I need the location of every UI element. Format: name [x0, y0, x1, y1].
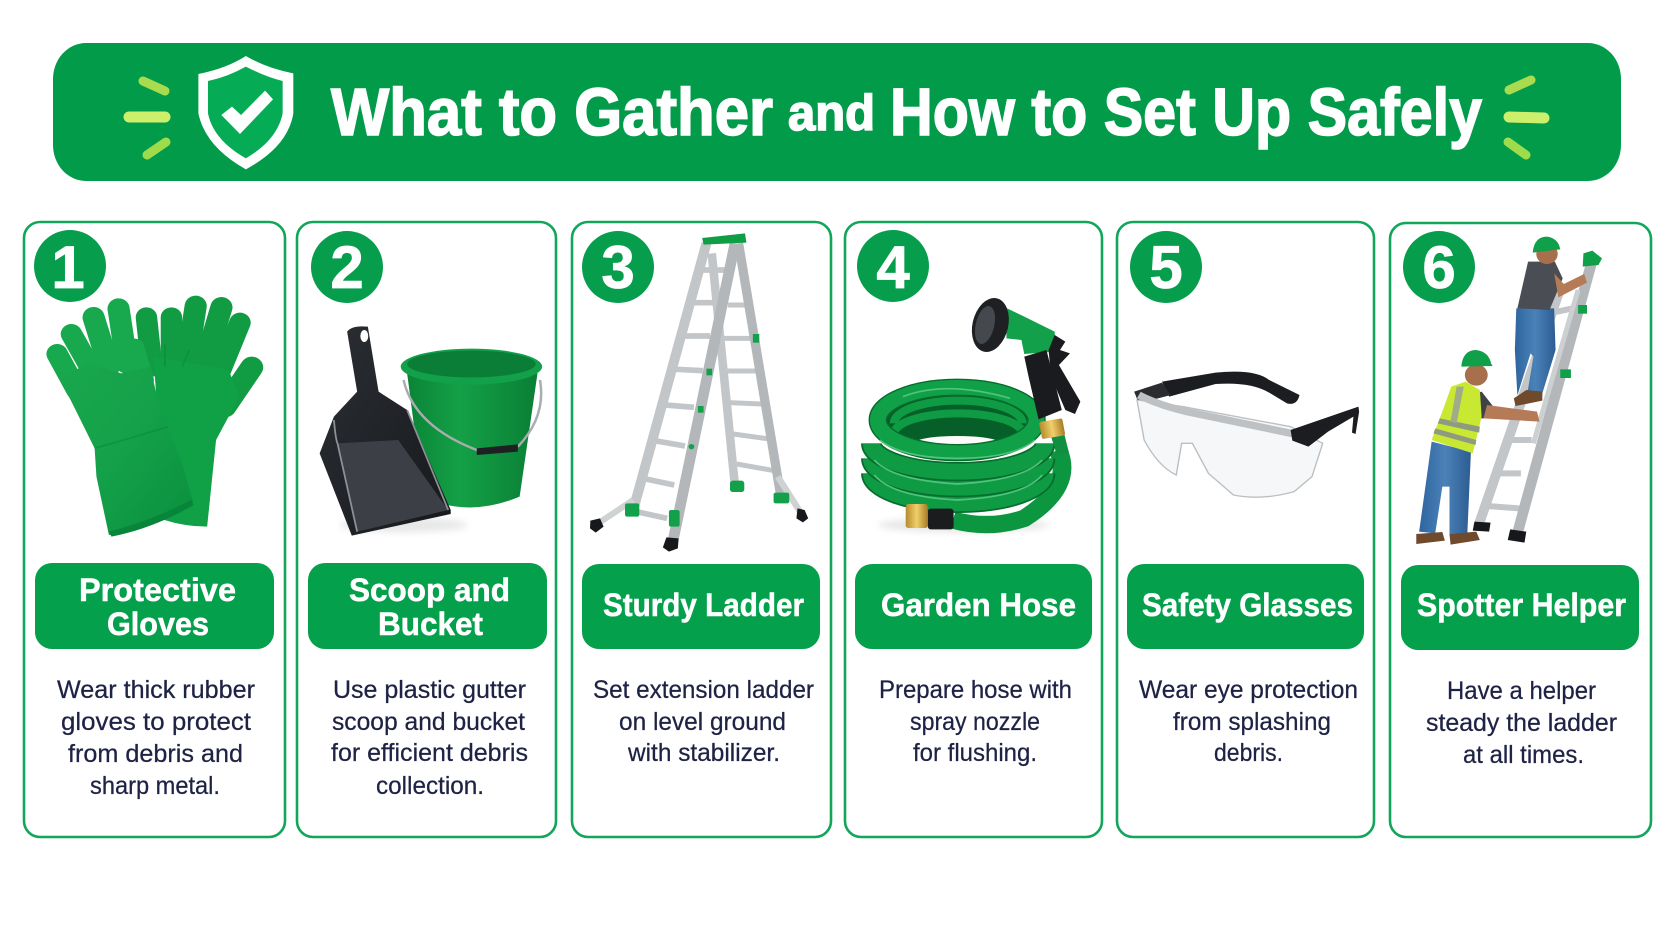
description	[879, 676, 1072, 767]
number badge 3	[582, 231, 654, 303]
icon: step ladder	[590, 233, 808, 552]
upper worker	[1514, 237, 1587, 406]
description	[331, 676, 528, 800]
description: Wear thick rubber	[57, 676, 255, 704]
label pill: Spotter Helper	[1417, 587, 1626, 623]
description: Use plastic gutter	[333, 676, 526, 704]
description: at all times.	[1463, 741, 1584, 769]
label pill	[308, 563, 547, 649]
description: sharp metal.	[90, 772, 220, 800]
icon: right sparkle rays	[1508, 80, 1544, 155]
description	[57, 676, 255, 800]
title banner	[53, 43, 1621, 181]
description: Prepare hose with	[879, 676, 1072, 704]
label pill	[1127, 564, 1364, 649]
icon: workers on extension ladder	[1416, 237, 1602, 545]
label pill	[855, 564, 1092, 649]
icon: scoop and bucket	[320, 326, 542, 536]
number badge 4	[857, 230, 929, 302]
description: debris.	[1214, 739, 1283, 767]
description	[593, 676, 814, 767]
icon: garden hose with nozzle	[871, 295, 1080, 532]
number badge 1: 1	[51, 234, 85, 301]
label pill: Gloves	[107, 606, 209, 642]
description: for flushing.	[913, 739, 1037, 767]
panel: 3 sturdy ladder	[572, 222, 831, 837]
lower worker spotter	[1416, 350, 1539, 545]
description: for efficient debris	[331, 739, 528, 767]
description: collection.	[376, 772, 484, 800]
label pill	[35, 563, 274, 649]
number badge 1	[34, 230, 106, 302]
description: Set extension ladder	[593, 676, 814, 704]
description: gloves to protect	[61, 708, 251, 736]
description	[1139, 676, 1358, 767]
icon: shield with check mark	[198, 56, 293, 169]
title text: How to Set Up Safely	[890, 75, 1482, 150]
number badge 6: 6	[1422, 234, 1456, 301]
title text: and	[788, 85, 875, 141]
label pill: Protective	[79, 572, 236, 608]
title text	[331, 75, 1482, 150]
description: from splashing	[1173, 708, 1331, 736]
number badge 6	[1403, 231, 1475, 303]
number badge 2	[311, 231, 383, 303]
number badge 5: 5	[1149, 234, 1183, 301]
label pill	[582, 564, 820, 649]
label pill: Sturdy Ladder	[603, 587, 804, 623]
icon: safety glasses	[1134, 372, 1359, 497]
label pill: Safety Glasses	[1142, 587, 1353, 623]
panel: 5 safety glasses	[1117, 222, 1374, 837]
description: with stabilizer.	[627, 739, 780, 767]
description: Wear eye protection	[1139, 676, 1358, 704]
panel: 6 spotter helper	[1390, 223, 1651, 837]
description: Have a helper	[1447, 677, 1596, 705]
number badge 5	[1130, 231, 1202, 303]
panel: 4 garden hose	[845, 222, 1102, 837]
label pill: Scoop and	[349, 572, 510, 608]
panel: 1 protective gloves	[24, 222, 285, 837]
number badge 4: 4	[876, 234, 910, 301]
label pill	[1401, 565, 1639, 650]
description: spray nozzle	[910, 708, 1040, 736]
number badge 3: 3	[601, 234, 635, 301]
description: on level ground	[619, 708, 786, 736]
description: scoop and bucket	[332, 708, 525, 736]
label pill: Garden Hose	[881, 587, 1076, 623]
icon: rubber gloves	[48, 306, 252, 537]
description: from debris and	[68, 740, 243, 768]
title text: What to Gather	[331, 75, 773, 150]
number badge 2: 2	[330, 234, 364, 301]
label pill: Bucket	[378, 606, 483, 642]
panel: 2 scoop and bucket	[297, 222, 556, 837]
icon: left sparkle rays	[129, 81, 166, 155]
description	[1426, 677, 1617, 769]
description: steady the ladder	[1426, 709, 1617, 737]
